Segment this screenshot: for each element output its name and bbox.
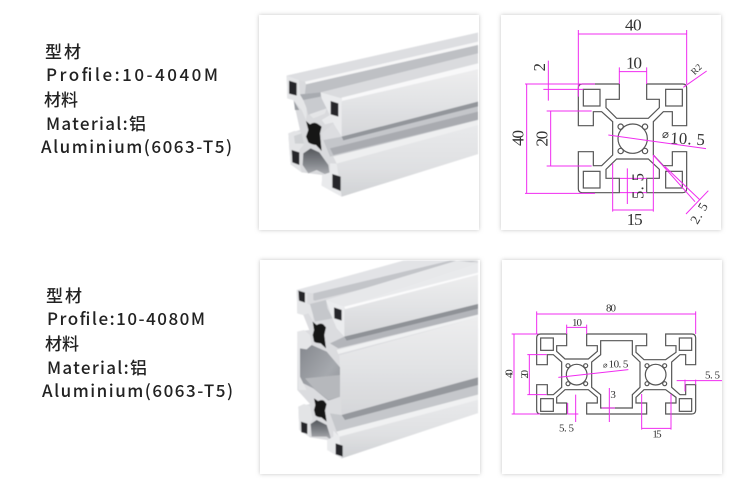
dimension labels: 20 bbox=[519, 369, 531, 379]
dimension labels: 3 bbox=[610, 389, 616, 401]
lower-left post bbox=[289, 131, 303, 170]
dimension labels: 5. 5 bbox=[628, 173, 647, 199]
panel: 4040 cross-section drawing bbox=[501, 15, 721, 230]
dimension labels bbox=[508, 16, 711, 229]
text block: profile 10-4040M specification bbox=[41, 38, 232, 158]
dimension labels: 2. 5 bbox=[687, 200, 711, 226]
dimension labels: 10. 5 bbox=[670, 128, 705, 149]
photo: extrusion 4080 bbox=[297, 261, 478, 458]
middle hollow bbox=[298, 332, 311, 390]
dimension labels bbox=[504, 302, 720, 441]
dimension labels: 20 bbox=[533, 131, 552, 147]
panel: 4080 cross-section drawing bbox=[502, 260, 722, 474]
label: material chinese: 材料 bbox=[45, 330, 79, 355]
dimension labels: 40 bbox=[625, 16, 642, 35]
panel: photo of 4080 profile bbox=[260, 260, 480, 474]
dimension lines bbox=[512, 311, 722, 430]
label: material: Material:铝 bbox=[46, 110, 146, 135]
dimension labels: 80 bbox=[606, 302, 616, 314]
diagram: 4080 profile outline bbox=[537, 334, 696, 414]
label: aluminium grade: Aluminium(6063-T5) bbox=[42, 377, 233, 402]
dimension labels: 15 bbox=[652, 429, 662, 441]
dimension labels: 40 bbox=[504, 369, 516, 378]
dimension labels: 5. 5 bbox=[559, 423, 574, 435]
label: profile model: Profile:10-4040M bbox=[46, 61, 218, 86]
label: material chinese: 材料 bbox=[44, 86, 78, 111]
dimension labels: 10 bbox=[626, 53, 642, 72]
photo: extrusion 4040 bbox=[287, 33, 478, 197]
dimension labels: 15 bbox=[627, 210, 643, 229]
dimension labels: 40 bbox=[508, 130, 527, 146]
dimension labels: ⌀ bbox=[662, 129, 669, 141]
dimension labels: 10 bbox=[572, 317, 582, 329]
dimension labels: 5. 5 bbox=[705, 370, 720, 382]
label: aluminium grade: Aluminium(6063-T5) bbox=[41, 133, 232, 158]
dimension labels: 10. 5 bbox=[609, 359, 629, 371]
panel: photo of 4040 profile bbox=[259, 15, 479, 230]
label: profile model: Profile:10-4080M bbox=[47, 305, 205, 330]
label: profile chinese: 型材 bbox=[45, 38, 83, 63]
label: profile chinese: 型材 bbox=[46, 282, 84, 307]
upper-left post bbox=[288, 76, 306, 118]
dimension labels: 2 bbox=[530, 63, 549, 71]
dimension lines bbox=[525, 30, 708, 214]
dimension labels: ⌀ bbox=[603, 360, 607, 369]
lower post and block bbox=[300, 404, 308, 423]
diagram: 4040 profile outline bbox=[578, 84, 687, 193]
label: material: Material:铝 bbox=[47, 354, 147, 379]
dimension labels: R2 bbox=[690, 62, 705, 77]
upper post and block bbox=[298, 293, 312, 318]
text block: profile 10-4080M specification bbox=[42, 282, 233, 402]
